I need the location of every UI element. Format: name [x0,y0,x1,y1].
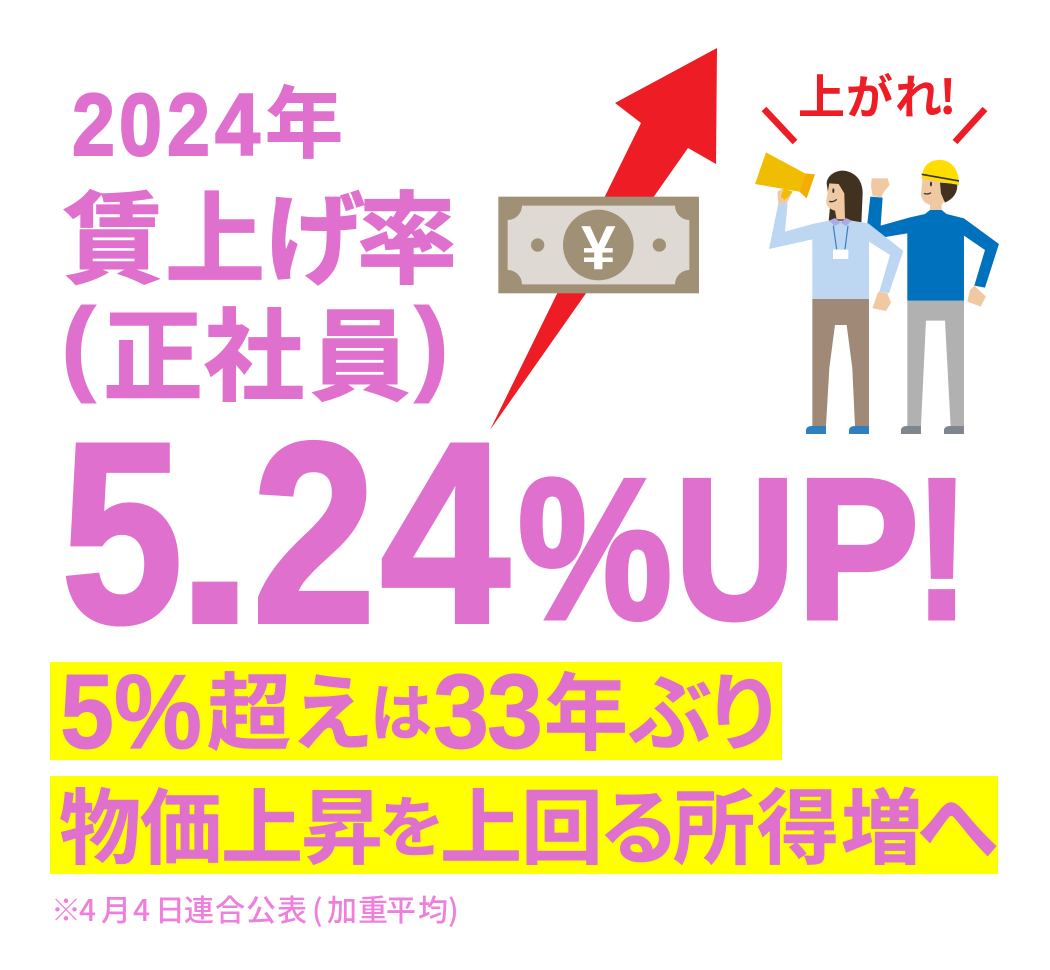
highlight line 2: 上回る所得増へ [440,762,999,881]
highlight line 2: を [379,775,445,871]
highlight line 1: % [114,653,202,771]
highlight line 1: 年ぶり [544,647,786,768]
man in blue sweater with helmet [867,160,999,434]
year heading: 2 [167,75,210,174]
callout: rise up shout [764,59,985,142]
year heading: 年 [265,62,343,174]
headline suffix: %UP!: U [675,438,795,661]
headline figure: 5.24: . [175,388,255,677]
illustration: two workers cheering [755,152,999,434]
icon: yen banknote: ¥ [581,214,616,283]
highlight line 1: は [370,663,432,753]
headline suffix: %UP! [518,438,969,661]
callout: rise up shout: 上がれ! [798,59,956,128]
heading: regular employees: ) [414,287,449,404]
heading: regular employees: 正社員 [103,276,410,421]
woman in light blue shirt with megaphone [755,152,903,434]
year heading: 4 [215,75,260,174]
arrow: rising red arrow [490,48,717,430]
highlight line 2 [50,762,999,881]
headline suffix: %UP!: P [797,438,919,661]
headline figure: 5.24: 4 [380,388,511,677]
icon: yen banknote [498,197,699,293]
headline suffix: %UP!: % [518,438,672,661]
footnote: ※4月4日連合公表(加重平均) [51,886,459,930]
year heading [72,62,343,174]
highlight line 1: 5 [60,653,114,771]
highlight line 1: 超え [207,647,374,768]
heading: wage increase rate: 賃上げ率 [63,159,457,304]
headline figure: 5.24 [61,388,511,677]
headline suffix: %UP!: ! [915,438,969,661]
highlight line 1: 3 [487,653,543,771]
heading: regular employees: ( [61,287,96,404]
headline figure: 5.24: 2 [252,388,376,677]
year heading: 2 [72,75,115,174]
highlight line 2: 物価上昇 [59,762,383,881]
highlight line 1 [50,647,786,771]
highlight line 1: 3 [433,653,489,771]
headline figure: 5.24: 5 [61,388,183,677]
year heading: 0 [119,75,162,174]
